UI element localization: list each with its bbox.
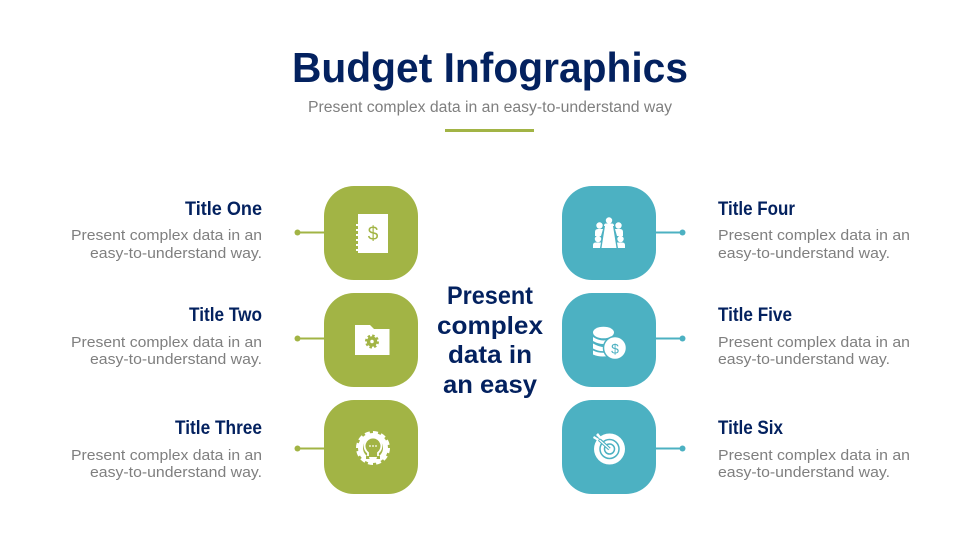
icon: meeting table [593, 217, 625, 248]
heading: title three: Title Three [175, 418, 262, 439]
text: title three description: Present complex data in an [71, 447, 262, 464]
text: title one description: easy-to-understand way. [90, 245, 262, 262]
heading: title one: Title One [185, 199, 262, 220]
text: title five description: easy-to-understand way. [718, 351, 890, 368]
connector: title four [655, 230, 686, 236]
text: title six description [718, 447, 910, 481]
title underline [445, 129, 534, 132]
panel: title six [562, 400, 910, 494]
panel: center message: data in [448, 341, 532, 369]
text: title one description: Present complex data in an [71, 227, 262, 244]
tile: title six [562, 400, 656, 494]
panel: title two [71, 293, 418, 387]
icon: coins: $ [611, 340, 619, 356]
icon: lightbulb gear [358, 432, 388, 464]
text: title three description: easy-to-understand way. [90, 464, 262, 481]
text: title one description [71, 227, 262, 262]
tile: title three [324, 400, 418, 494]
text: title four description: Present complex data in an [718, 227, 910, 244]
tile: title one [324, 186, 418, 280]
panel: title three [71, 400, 418, 494]
text: title six description: Present complex data in an [718, 447, 910, 464]
heading: title four: Title Four [718, 199, 796, 220]
panel: title five [562, 293, 910, 387]
text: title two description: Present complex data in an [71, 334, 262, 351]
text: title four description [718, 227, 910, 262]
tile: title four [562, 186, 656, 280]
connector: title three [294, 446, 325, 452]
heading: title two: Title Two [189, 305, 262, 326]
panel: center message [437, 282, 543, 399]
icon: dollar notebook [356, 214, 388, 253]
text: title two description [71, 334, 262, 368]
panel: title one [71, 186, 418, 280]
tile: title two [324, 293, 418, 387]
heading: title six: Title Six [718, 418, 783, 439]
connector: title two [294, 336, 325, 342]
connector: title six [655, 446, 686, 452]
text: title five description: Present complex data in an [718, 334, 910, 351]
icon: coins [593, 327, 626, 360]
icon: settings folder [355, 325, 390, 355]
heading: title five: Title Five [718, 305, 792, 326]
text: title three description [71, 447, 262, 481]
connector: title five [655, 336, 686, 342]
panel: title four [562, 186, 910, 280]
title: Budget Infographics [292, 44, 688, 91]
tile: title five [562, 293, 656, 387]
subtitle: Present complex data in an easy-to-understand way [308, 99, 672, 116]
panel: center message: Present [447, 282, 534, 310]
connector: title one [294, 230, 325, 236]
icon: target [593, 433, 625, 464]
icon: dollar notebook: $ [368, 224, 379, 245]
panel: center message: complex [437, 312, 543, 340]
text: title two description: easy-to-understand way. [90, 351, 262, 368]
panel: center message: an easy [443, 371, 537, 399]
text: title four description: easy-to-understand way. [718, 245, 890, 262]
text: title six description: easy-to-understand way. [718, 464, 890, 481]
text: title five description [718, 334, 910, 368]
